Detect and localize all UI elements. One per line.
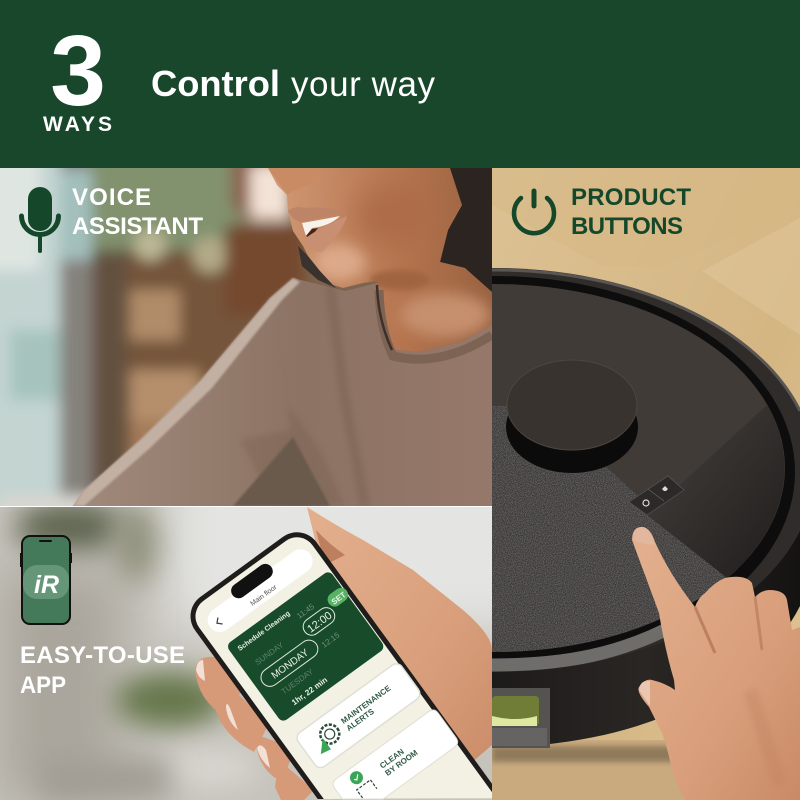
set badge [325,585,351,609]
lidar tower [506,360,638,473]
label: ways: WAYS [43,113,112,136]
icon: power button [643,500,649,506]
hand crease near phone [316,530,345,565]
hand pressing button [632,527,800,800]
panel: easy-to-use app [0,507,492,800]
card heading: Schedule Cleaning [237,610,292,653]
icon: app phone [20,536,72,624]
maintenance alerts card [294,661,423,770]
schedule card: SET [330,590,348,607]
robot body side [492,531,800,744]
label: product buttons: BUTTONS [571,213,683,240]
schedule card: 12:15 [320,630,342,650]
pale wave band [23,565,69,599]
phone [191,532,503,799]
day picker: SUNDAY [253,640,286,667]
hair behind chin [298,246,336,288]
label: easy-to-use app: EASY-TO-USE [20,642,185,669]
title: control your way: Control [151,63,280,104]
light ring along front [492,630,665,665]
logo: iR: iR [34,571,59,599]
blurred background [0,507,492,800]
hair [440,168,492,296]
shirt collar [379,290,492,359]
dustbin window [492,688,550,748]
title: control your way: your way [291,65,436,104]
icon: microphone [22,187,58,253]
hand behind phone [307,507,492,760]
label: easy-to-use app: APP [20,672,66,699]
blurred room background [0,150,305,530]
label: voice assistant: ASSISTANT [72,213,203,240]
icon: home button [662,486,668,491]
text: maintenance alerts: MAINTENANCE [339,683,393,726]
thumbnail [639,681,650,706]
panel: product buttons [492,168,800,800]
schedule card: TUESDAY [280,667,316,696]
fingers left of phone [195,657,314,800]
main floor label: Main floor [249,584,279,608]
panel: voice assistant [0,168,492,506]
phone screen [195,537,497,799]
header band [0,0,800,168]
finger shadows [695,607,715,653]
schedule card [226,569,387,723]
clean by room content [347,735,421,799]
fingernails [196,660,270,768]
robot top surface [492,284,785,652]
wood floor [492,168,800,800]
shirt [73,278,492,506]
button plate [629,476,684,515]
schedule card: 12:00 [305,610,335,636]
top bar [208,549,312,632]
back arrow [216,618,223,625]
text: clean by room: CLEAN [378,747,406,770]
clean by room card [333,710,458,799]
label: voice assistant: VOICE [72,184,151,211]
lips [288,207,348,252]
text: clean by room: BY ROOM [383,748,420,778]
screen content: upper [208,549,420,768]
phone body [191,532,503,799]
fingernail [634,527,655,544]
icon: room pin [347,767,377,799]
face and neck [268,168,492,352]
schedule card: MONDAY [270,647,311,682]
icon: gear alert [309,721,345,756]
dark button wedge [647,405,785,578]
fabric top [492,406,727,652]
robot rim [492,268,800,672]
text: maintenance alerts: ALERTS [345,706,376,733]
big number 3: 3 [50,15,106,127]
label: product buttons: PRODUCT [571,184,691,211]
forearm shadow [233,437,330,506]
icon: power [514,191,554,233]
time picker: 11:45 [295,602,317,621]
camera notch [231,564,273,598]
duration: 1hr, 22 min [290,675,329,707]
